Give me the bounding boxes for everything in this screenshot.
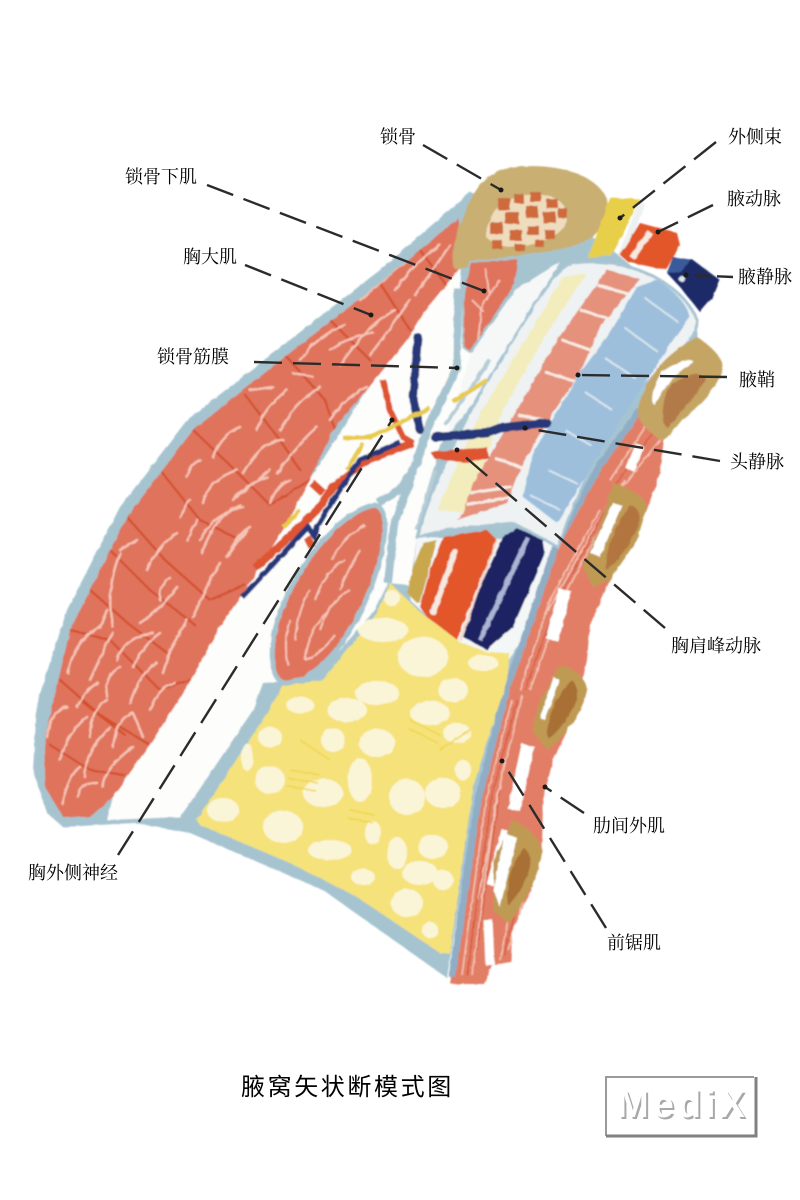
vein cross section — [463, 528, 545, 650]
sheath cream layer — [437, 273, 587, 513]
lateral cord — [588, 198, 645, 258]
label: axillary vein: 腋静脉 — [738, 267, 792, 287]
label: axillary artery: 腋动脉 — [727, 189, 781, 209]
label: clavicle: 锁骨 — [380, 127, 416, 147]
label: subclavius: 锁骨下肌 — [125, 167, 197, 187]
watermark: MediX: MediX — [619, 1086, 751, 1128]
pectoralis major muscle — [45, 218, 465, 817]
pectoralis minor muscle — [272, 505, 385, 683]
label: cephalic vein: 头静脉 — [730, 452, 784, 472]
rib 1 — [638, 337, 723, 440]
clavicle bone — [453, 166, 608, 269]
anatomical illustration — [33, 166, 723, 984]
rib 3 — [532, 665, 587, 750]
white compartment — [107, 225, 490, 820]
label: lateral cord: 外侧束 — [728, 127, 782, 147]
watermark: MediX — [606, 1077, 756, 1136]
label: external intercostal: 肋间外肌 — [593, 816, 665, 836]
white intercostal gaps — [514, 590, 565, 810]
watermark: MediX: MediX — [617, 1084, 749, 1126]
cephalic vein and thoracoacromial artery — [242, 337, 547, 597]
chest wall muscle and fascia — [450, 405, 664, 984]
vein in sheath — [523, 280, 690, 523]
label: axillary sheath: 腋鞘 — [739, 370, 775, 390]
label: pectoralis major: 胸大肌 — [183, 247, 237, 267]
label: clavipectoral fascia: 锁骨筋膜 — [157, 347, 229, 367]
white space below sheath — [410, 537, 560, 660]
subclavius muscle — [463, 258, 518, 352]
artery cross section — [407, 530, 497, 640]
internal fascia lines — [378, 288, 458, 583]
axillary fat — [197, 583, 510, 953]
axillary artery stump — [620, 223, 680, 270]
label: serratus anterior: 前锯肌 — [607, 933, 661, 953]
white band beside sheath — [445, 262, 560, 440]
axillary vein stump — [667, 257, 720, 312]
label: thoracoacromial artery: 胸肩峰动脉 — [671, 636, 761, 656]
rib 4 — [493, 820, 542, 923]
leader lines — [118, 142, 733, 928]
fascia outer envelope — [33, 192, 697, 978]
label: lateral pectoral nerve: 胸外侧神经 — [28, 863, 118, 883]
title: 腋窝矢状断模式图 — [241, 1074, 454, 1101]
axillary sheath — [417, 262, 697, 547]
rib 2 — [583, 483, 647, 587]
leader end dots — [368, 188, 688, 790]
brachial artery in sheath — [457, 270, 640, 520]
